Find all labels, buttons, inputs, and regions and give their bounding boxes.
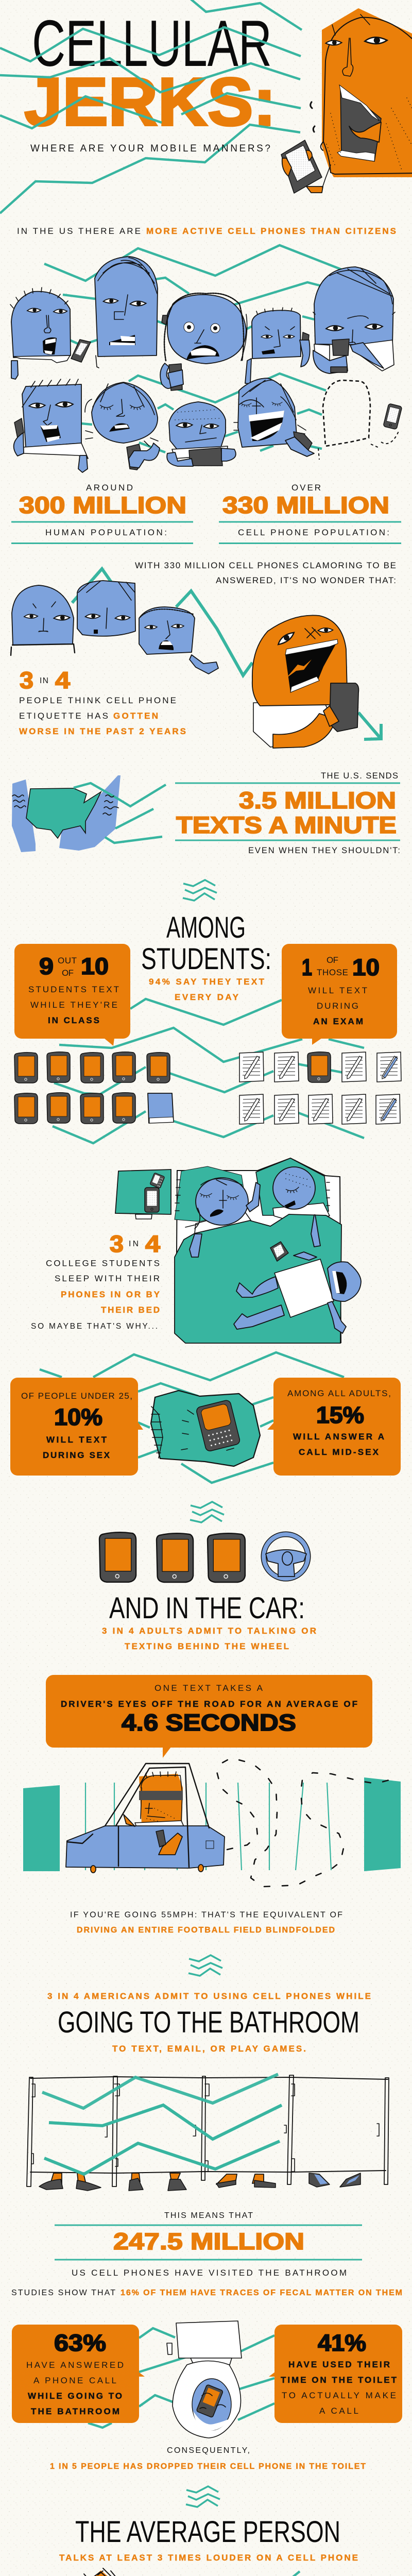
- illustration: bathroom stalls with feet: [27, 2075, 389, 2191]
- subtitle: WHERE ARE YOUR MOBILE MANNERS?: [30, 143, 270, 154]
- stat: human population: [11, 483, 193, 544]
- callout: 41%: HAVE USED THEIR: [288, 2360, 390, 2369]
- stat: 3 in 4 etiquette worse: ETIQUETTE HAS: [19, 711, 108, 721]
- intro statement: MORE ACTIVE CELL PHONES THAN CITIZENS: [146, 226, 396, 236]
- callout: 15% of adults: WILL ANSWER A: [293, 1432, 384, 1442]
- person: blue man with glasses-free stare, row 1: [10, 287, 91, 379]
- stat: 3 in 4 sleep with phones: 3: [110, 1231, 124, 1257]
- heading: going to the bathroom: [47, 1991, 371, 2054]
- stat: 247.5 million: THIS MEANS THAT: [164, 2211, 253, 2220]
- callout: 9 out of 10 students: IN CLASS: [48, 1015, 99, 1025]
- callout: 4.6 seconds: [46, 1675, 372, 1758]
- callout: 1 of those 10: WILL TEXT: [308, 986, 367, 995]
- title: [24, 7, 276, 140]
- heading: among students: 94% SAY THEY TEXT: [149, 977, 265, 987]
- callout: 9 out of 10 students: 9: [39, 953, 54, 979]
- callout: 9 out of 10 students: [14, 944, 130, 1046]
- callout: 41%: TIME ON THE TOILET: [281, 2375, 397, 2385]
- illustration: nightstand with phones: [115, 1170, 171, 1219]
- callout: 15% of adults: CALL MID-SEX: [299, 1447, 379, 1457]
- illustration: bed with two sleepers and a person lying across it: [175, 1158, 361, 1343]
- callout: 63%: 63%: [54, 2330, 106, 2356]
- stat: 3 in 4 sleep with phones: IN: [129, 1240, 139, 1248]
- stat: 3 in 4 sleep with phones: COLLEGE STUDENTS: [46, 1258, 160, 1268]
- zigzag lines: sex section: [40, 1352, 344, 1483]
- heading: going to the bathroom: TO TEXT, EMAIL, OR PLAY GAMES.: [112, 2044, 306, 2054]
- callout: 4.6 seconds: 4.6 SECONDS: [122, 1709, 296, 1736]
- callout: 1 of those 10: [282, 944, 397, 1045]
- text: with 330 million: ANSWERED, IT'S NO WONDER THAT:: [216, 575, 396, 585]
- callout: 9 out of 10 students: STUDENTS TEXT: [28, 985, 119, 994]
- callout: 63%: WHILE GOING TO: [28, 2391, 122, 2401]
- icon: chevron divider: [188, 1955, 222, 1976]
- stat: 3 in 4 etiquette worse: IN: [40, 676, 48, 685]
- zigzag lines over stalls: [42, 2074, 282, 2174]
- stat: 3 in 4 etiquette worse: WORSE IN THE PAST 2 YEARS: [19, 726, 186, 736]
- stat: 3.5 million texts a minute: THE U.S. SENDS: [321, 771, 398, 781]
- callout: 41%: A CALL: [319, 2406, 358, 2416]
- callout: 63%: [12, 2325, 145, 2423]
- stat: 3 in 4 sleep with phones: SLEEP WITH THEIR: [55, 1274, 160, 1283]
- text: consequently: 1 IN 5 PEOPLE HAS DROPPED THEIR CELL PHONE IN THE TOILET: [50, 2462, 366, 2471]
- heading: among students: AMONG: [166, 911, 246, 944]
- callout: 10% under 25: WILL TEXT: [46, 1435, 107, 1445]
- callout: 63%: THE BATHROOM: [31, 2406, 119, 2416]
- callout: 41%: TO ACTUALLY MAKE: [282, 2391, 396, 2400]
- callout: 1 of those 10: 1: [302, 954, 312, 980]
- callout: 15% of adults: AMONG ALL ADULTS,: [287, 1388, 391, 1398]
- stat: 3.5 million texts a minute: 3.5 MILLION: [239, 787, 396, 814]
- stat: 3 in 4 etiquette worse: PEOPLE THINK CELL PHONE: [19, 696, 176, 705]
- stat: cell phone population: CELL PHONE POPULATION:: [238, 528, 389, 537]
- icons: phones and book in class: [14, 1052, 174, 1124]
- map: United States: [12, 775, 166, 852]
- heading: among students: EVERY DAY: [175, 992, 239, 1002]
- callout: 1 of those 10: DURING: [317, 1001, 358, 1011]
- callout: 1 of those 10: THOSE: [317, 968, 348, 977]
- background zigzag lines: title: [0, 0, 302, 213]
- callout: 9 out of 10 students: OUT: [58, 956, 77, 965]
- icon: chevron divider: [186, 2486, 220, 2507]
- stat: human population: 300 MILLION: [19, 492, 186, 518]
- illustration: blindfolded driver in blue car: [66, 1764, 225, 1873]
- person: blue woman with closed eyes: [85, 382, 160, 470]
- stat: 247.5 million: 247.5 MILLION: [113, 2228, 304, 2255]
- heading: the average person: TALKS AT LEAST 3 TIMES LOUDER ON A CELL PHONE: [59, 2553, 358, 2563]
- heading: the average person: [59, 2515, 358, 2563]
- character: screaming orange man: [24, 2568, 194, 2576]
- icons: exam papers with one phone: [239, 1052, 401, 1124]
- person: blue man with tablet, buzzcut: [167, 402, 236, 466]
- heading: and in the car: TEXTING BEHIND THE WHEEL: [125, 1641, 289, 1651]
- stat: 3.5 million texts a minute: EVEN WHEN THEY SHOULDN'T:: [248, 846, 400, 855]
- heading: and in the car: AND IN THE CAR:: [109, 1591, 305, 1625]
- person: blue angry man: [11, 585, 75, 655]
- stat: 247.5 million: [55, 2211, 362, 2278]
- zigzag lines behind crowd: [44, 245, 344, 452]
- callout: 1 of those 10: OF: [327, 955, 338, 965]
- stat: 3 in 4 etiquette worse: GOTTEN: [113, 711, 158, 721]
- intro statement: IN THE US THERE ARE: [17, 226, 141, 236]
- stat: 3 in 4 etiquette worse: 3: [20, 667, 33, 693]
- stat: 3 in 4 sleep with phones: THEIR BED: [101, 1305, 160, 1315]
- stat: 3 in 4 etiquette worse: [19, 667, 186, 736]
- icon: chevron divider: [190, 1502, 224, 1522]
- stat: human population: HUMAN POPULATION:: [45, 528, 167, 537]
- title: CELLULAR: [32, 7, 272, 80]
- callout: 63%: A PHONE CALL: [33, 2376, 116, 2385]
- callout: 1 of those 10: 10: [352, 954, 380, 980]
- illustration: phone buzzing on pillow: [151, 1391, 260, 1466]
- person: blue man with balding stripes and tablet: [313, 267, 395, 374]
- heading: the average person: THE AVERAGE PERSON: [75, 2515, 340, 2549]
- zigzag lines: average person: [169, 2571, 386, 2576]
- callout: 41%: 41%: [318, 2330, 366, 2356]
- intro statement: [17, 226, 396, 236]
- zigzag lines: toilet: [88, 2328, 274, 2428]
- zigzag lines: students: [53, 999, 364, 1143]
- person: orange shouting man with phone: [252, 615, 358, 748]
- dashed outline: missing person silhouette: [318, 380, 402, 460]
- stat: 3 in 4 sleep with phones: 4: [145, 1231, 160, 1257]
- person: blue man with swept hair: [95, 257, 171, 368]
- stat: 3 in 4 etiquette worse: 4: [55, 667, 70, 693]
- heading: among students: STUDENTS:: [141, 942, 271, 976]
- callout: 9 out of 10 students: WHILE THEY'RE: [30, 1000, 117, 1010]
- callout: 9 out of 10 students: OF: [62, 968, 74, 978]
- stat: cell phone population: OVER: [291, 483, 321, 493]
- callout: 1 of those 10: AN EXAM: [313, 1016, 363, 1026]
- icons: three phones and a steering wheel: [99, 1532, 308, 1582]
- callout: 10% under 25: 10%: [54, 1404, 102, 1430]
- dashed swerving path: [217, 1758, 393, 1887]
- person: blue man on phone, row 1: [245, 308, 310, 384]
- text: football field blindfolded: [70, 1910, 342, 1935]
- person: blue woman with curly hair: [160, 293, 247, 391]
- illustration: phone dropped in toilet: [167, 2321, 242, 2438]
- text: consequently: [50, 2446, 366, 2471]
- callout: 4.6 seconds: ONE TEXT TAKES A: [154, 1683, 263, 1693]
- person: blue woman laughing: [234, 378, 314, 456]
- callout: 9 out of 10 students: 10: [81, 953, 109, 979]
- callout: 63%: HAVE ANSWERED: [26, 2360, 124, 2370]
- road: teal verges and lane lines: [23, 1777, 401, 1871]
- text: football field blindfolded: DRIVING AN ENTIRE FOOTBALL FIELD BLINDFOLDED: [77, 1926, 335, 1935]
- stat: 3.5 million texts a minute: [175, 771, 400, 855]
- callout: 10% under 25: [10, 1378, 143, 1476]
- callout: 15% of adults: 15%: [316, 1402, 364, 1428]
- stat: cell phone population: 330 MILLION: [222, 492, 389, 518]
- person: blue worried man: [139, 607, 218, 674]
- stat: 3 in 4 sleep with phones: PHONES IN OR BY: [61, 1290, 160, 1299]
- text: with 330 million: [135, 561, 396, 585]
- icon: chevron divider: [183, 880, 217, 901]
- title: JERKS:: [24, 64, 276, 140]
- stat: 247.5 million: US CELL PHONES HAVE VISITED THE BATHROOM: [72, 2268, 347, 2278]
- character: shouting orange man with tablet: [281, 8, 412, 193]
- zigzag arrow falling: [72, 569, 381, 739]
- stat: 3 in 4 sleep with phones: [31, 1231, 160, 1331]
- person: blue man row 2, flat top: [14, 379, 88, 472]
- text: football field blindfolded: IF YOU'RE GOING 55MPH: THAT'S THE EQUIVALENT OF: [70, 1910, 342, 1920]
- heading: going to the bathroom: 3 IN 4 AMERICANS ADMIT TO USING CELL PHONES WHILE: [47, 1991, 371, 2001]
- stat: 3.5 million texts a minute: TEXTS A MINUTE: [176, 812, 397, 838]
- stat: 3 in 4 sleep with phones: SO MAYBE THAT'S WHY...: [31, 1322, 158, 1331]
- text: with 330 million: WITH 330 MILLION CELL PHONES CLAMORING TO BE: [135, 561, 396, 570]
- callout: 10% under 25: OF PEOPLE UNDER 25,: [21, 1391, 132, 1401]
- text: fecal matter: STUDIES SHOW THAT: [11, 2289, 115, 2297]
- text: consequently: CONSEQUENTLY,: [167, 2446, 250, 2455]
- callout: 4.6 seconds: DRIVER'S EYES OFF THE ROAD FOR AN AVERAGE OF: [61, 1699, 357, 1709]
- callout: 41%: [269, 2325, 402, 2423]
- callout: 15% of adults: [267, 1378, 401, 1476]
- text: fecal matter: 16% OF THEM HAVE TRACES OF FECAL MATTER ON THEM: [121, 2289, 402, 2297]
- heading: and in the car: 3 IN 4 ADULTS ADMIT TO TALKING OR: [102, 1626, 316, 1636]
- heading: among students: [141, 911, 271, 1002]
- stat: cell phone population: [219, 483, 401, 544]
- stat: human population: AROUND: [86, 483, 133, 493]
- callout: 10% under 25: DURING SEX: [43, 1450, 110, 1460]
- person: blue flat-top man: [77, 581, 135, 636]
- heading: and in the car: [102, 1591, 316, 1651]
